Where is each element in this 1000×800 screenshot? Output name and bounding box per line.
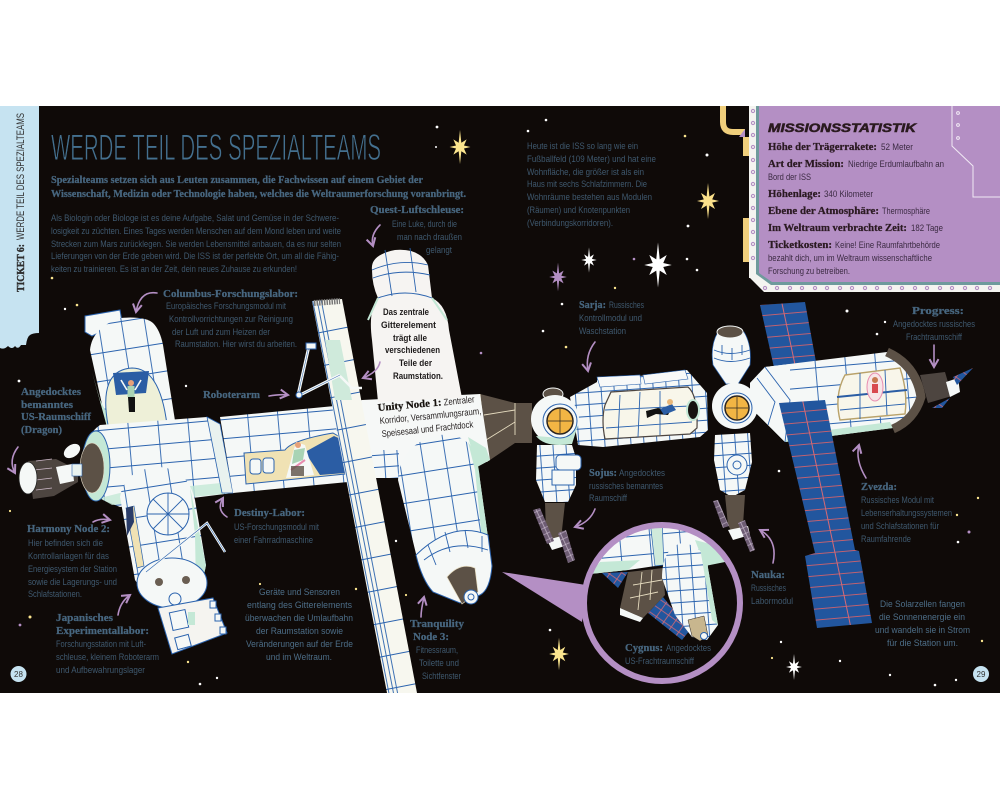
text: central truss note: verschiedenen	[385, 345, 440, 356]
label: Quest: man nach draußen	[397, 231, 462, 242]
statistics list	[768, 141, 944, 276]
label: Progress: Angedocktes russisches	[893, 318, 975, 329]
label: Japanese lab	[56, 613, 159, 675]
statistics list: 182 Tage	[911, 222, 943, 233]
title: WERDE TEIL DES SPEZIALTEAMS	[51, 127, 381, 168]
module: Quest airlock	[368, 248, 462, 402]
label: Progress: Frachtraumschiff	[906, 331, 962, 342]
label: Columbus: der Luft und zum Heizen der	[172, 326, 270, 337]
text: central truss note: trägt alle	[393, 333, 427, 344]
page number 29: 29	[977, 670, 986, 679]
icon: astronaut on bicycle	[291, 442, 305, 476]
truss: central lattice	[312, 299, 417, 693]
statistics list: Höhenlage:	[768, 189, 821, 200]
label: Tranquility: Tranquility	[410, 619, 464, 630]
text: ISS size: Wohnräume bestehen aus Modulen	[527, 191, 652, 202]
label: Quest: Eine Luke, durch die	[392, 218, 457, 229]
label: Sarja	[579, 299, 644, 336]
label: Harmony: Kontrollanlagen für das	[28, 550, 109, 561]
text: central truss note	[381, 307, 443, 382]
intro text: Spezialteams setzen sich aus Leuten zusammen, die Fachwissen auf einem Gebiet der	[51, 175, 423, 186]
label: Nauka: Russisches	[751, 582, 786, 593]
label: Harmony	[27, 524, 117, 599]
module: Russian main section	[570, 370, 708, 447]
label: Zvezda: Russisches Modul mit	[861, 494, 934, 505]
label: Tranquility: Sichtfenster	[422, 670, 461, 681]
label: Nauka: Nauka:	[751, 570, 785, 581]
label: Japanese lab: schleuse, kleinem Roboterarm	[56, 651, 159, 662]
box: experiment platform	[158, 598, 227, 654]
heading: Missionsstatistik: MISSIONSSTATISTIK	[768, 123, 917, 135]
label: Sarja: Kontrollmodul und	[579, 312, 642, 323]
statistics list: Ticketkosten:	[768, 240, 832, 251]
module: Tranquility	[398, 435, 492, 604]
module: upper vertical	[712, 326, 750, 384]
body text: keiten zu trainieren. Es ist an der Zeit, dein neues Zuhause zu erkunden!	[51, 263, 297, 274]
label: Sarja: Sarja:	[579, 300, 606, 311]
text: solar cells: die Sonnenenergie ein	[879, 612, 965, 623]
label: Harmony: Harmony Node 2:	[27, 524, 110, 535]
text: ISS size: Fußballfeld (109 Meter) und hat eine	[527, 153, 656, 164]
label: Columbus	[163, 289, 298, 349]
intro text: Wissenschaft, Medizin oder Technologie haben, welches die Weltraumerforschung voranbringt.	[51, 189, 466, 200]
left tab: ticket label: WERDE TEIL DES SPEZIALTEAMS	[15, 113, 27, 240]
page number 28: 28	[14, 670, 23, 679]
label: Tranquility: Node 3:	[413, 632, 449, 643]
callout: magnified inset	[502, 515, 745, 681]
label: Zvezda: und Schlafstationen für	[861, 520, 939, 531]
label: Cygnus: Angedocktes	[666, 642, 711, 653]
text: solar cells	[875, 599, 970, 649]
statistics list: Forschung zu betreiben.	[768, 265, 850, 276]
module: Zvezda	[750, 352, 921, 442]
label: Dragon: (Dragon)	[21, 425, 62, 436]
text: solar cells: und wandeln sie in Strom	[875, 625, 970, 636]
text: ISS size: Heute ist die ISS so lang wie ein	[527, 140, 638, 151]
icon: yellow window 2	[722, 393, 752, 423]
page number 29	[973, 666, 989, 682]
label: Sojus: Sojus:	[589, 468, 617, 479]
label: Dragon	[21, 387, 92, 436]
text: Unity node: Korridor, Versammlungsraum,	[379, 405, 482, 426]
text: central truss note: Teile der	[399, 358, 432, 369]
module: Russian left branch with Soyuz	[533, 445, 581, 563]
label: Sojus: Angedocktes	[619, 467, 665, 478]
panel: black spread background	[0, 106, 1000, 693]
label: Japanese lab: Japanisches	[56, 613, 113, 624]
body text: Lieferungen von der Erde geben wird. Die ISS ist der perfekte Ort, um all die Fähig-	[51, 250, 339, 261]
text: devices and sensors: Geräte und Sensoren	[259, 587, 340, 598]
spacecraft: Soyuz	[533, 503, 575, 563]
panel: mission statistics	[749, 106, 1000, 292]
label: Tranquility	[410, 619, 464, 681]
module: lower vertical with Soyuz	[713, 433, 755, 552]
left tab: ticket label	[0, 106, 39, 349]
arrows: purple pointers	[12, 225, 934, 617]
body text	[51, 212, 341, 274]
label: Zvezda: Lebenserhaltungssystemen	[861, 507, 952, 518]
label: Destiny: US-Forschungsmodul mit	[234, 521, 319, 532]
text: central truss note: Raumstation.	[393, 371, 443, 382]
text: ISS size: Wohnfläche, die größer ist als ein	[527, 166, 644, 177]
label: Quest: gelangt	[426, 244, 452, 255]
label: Zvezda: Zvezda:	[861, 482, 897, 493]
label: Sarja: Waschstation	[579, 325, 626, 336]
left tab: ticket label: TICKET 6:	[15, 244, 27, 292]
text: Unity node: Speisesaal und Frachtdock	[381, 418, 474, 439]
icon: small robotic arm	[146, 523, 225, 572]
label: Progress: Progress:	[912, 306, 964, 317]
icon: astronaut in sleeping pod	[867, 373, 883, 401]
text: ISS size	[527, 140, 656, 228]
label: Columbus: Kontrollvorrichtungen zur Reinigung	[169, 313, 293, 324]
text: central truss note: Gitterelement	[381, 320, 437, 331]
statistics list: Thermosphäre	[882, 205, 930, 216]
text: ISS size: (Verbindungskorridoren).	[527, 217, 613, 228]
statistics list: 340 Kilometer	[824, 188, 873, 199]
statistics list: Bord der ISS	[768, 171, 811, 182]
label: Destiny: einer Fahrradmaschine	[234, 534, 313, 545]
text: ISS size: Haus mit sechs Schlafzimmern. Die	[527, 178, 647, 189]
text: central truss note: Das zentrale	[383, 307, 429, 318]
text: ISS size: (Räumen) und Knotenpunkten	[527, 204, 630, 215]
text: devices and sensors	[245, 587, 353, 663]
module: Harmony node	[80, 417, 233, 507]
label: Harmony: Hier befinden sich die	[28, 537, 103, 548]
text: devices and sensors: überwachen die Umlaufbahn	[245, 613, 353, 624]
solar array lower part	[779, 400, 872, 628]
label: Destiny: Destiny-Labor:	[234, 508, 305, 519]
label: Sojus: russisches bemanntes	[589, 480, 663, 491]
text: Unity node: Zentraler	[443, 393, 475, 407]
stars and dots field	[9, 119, 983, 686]
label: Dragon: bemanntes	[21, 400, 73, 411]
icon: yellow pipe	[723, 106, 749, 262]
text: devices and sensors: und im Weltraum.	[266, 652, 332, 663]
text: devices and sensors: entlang des Gitterelements	[247, 600, 352, 611]
statistics list: Niedrige Erdumlaufbahn an	[848, 158, 944, 169]
label: Tranquility: Fitnessraum,	[416, 644, 458, 655]
page number 28	[10, 666, 26, 682]
spacecraft: Progress	[920, 368, 973, 408]
label: Tranquility: Toilette und	[419, 657, 459, 668]
icon: large robotic arm	[296, 343, 362, 398]
label: Cygnus	[625, 642, 711, 666]
text: Unity node: Unity Node 1:	[377, 397, 442, 414]
label: Zvezda: Raumfahrende	[861, 533, 911, 544]
label: Columbus: Raumstation. Hier wirst du arbeiten.	[175, 338, 297, 349]
body text: losigkeit zu züchten. Eines Tages werden Menschen auf dem Mond leben und weite	[51, 225, 341, 236]
module: Kibo lower arm	[120, 467, 227, 654]
text: Unity node	[377, 393, 482, 439]
spacecraft: Dragon	[19, 441, 83, 499]
label: Harmony: sowie die Lagerungs- und	[28, 576, 117, 587]
label: Zvezda	[861, 482, 952, 544]
label: Sarja: Russisches	[609, 299, 644, 310]
label: Harmony: Energiesystem der Station	[28, 563, 117, 574]
label: Harmony: Schlafstationen.	[28, 588, 82, 599]
text: devices and sensors: Veränderungen auf der Erde	[246, 639, 353, 650]
label: Progress	[893, 306, 975, 342]
module: Columbus lab	[85, 310, 176, 427]
statistics list: Im Weltraum verbrachte Zeit:	[768, 223, 907, 234]
text: solar cells: Die Solarzellen fangen	[880, 599, 965, 610]
label: Japanese lab: und Aufbewahrungslager	[56, 664, 145, 675]
label: Cygnus: US-Frachtraumschiff	[625, 655, 694, 666]
body text: Als Biologin oder Biologe ist es deine Aufgabe, Salat und Gemüse in der Schwere-	[51, 212, 339, 223]
icon: astronaut in Columbus	[121, 380, 141, 412]
statistics list: Art der Mission:	[768, 159, 844, 170]
solar array upper part	[760, 302, 816, 372]
label: Japanese lab: Forschungsstation mit Luft-	[56, 638, 146, 649]
text: solar cells: für die Station um.	[887, 638, 958, 649]
icon: yellow window	[543, 404, 577, 438]
module: Destiny lab	[220, 405, 348, 493]
label: Sojus: Raumschiff	[589, 492, 627, 503]
label: Cygnus: Cygnus:	[625, 643, 663, 654]
statistics list: 52 Meter	[881, 141, 913, 152]
text: devices and sensors: der Raumstation sowie	[256, 626, 343, 637]
statistics list: Keine! Eine Raumfahrtbehörde	[835, 239, 940, 250]
label: Quest	[370, 205, 464, 255]
label: Quest: Quest-Luftschleuse:	[370, 205, 464, 216]
statistics list: Höhe der Trägerrakete:	[768, 142, 877, 153]
label: Columbus: Columbus-Forschungslabor:	[163, 289, 298, 300]
icon: floating astronaut	[646, 399, 676, 418]
module: Russian node 1	[531, 388, 579, 445]
label: Nauka: Labormodul	[751, 595, 793, 606]
label: Sojus	[589, 467, 665, 503]
label: Roboterarm: Roboterarm	[203, 390, 261, 401]
label: Dragon: US-Raumschiff	[21, 412, 92, 423]
label: Japanese lab: Experimentallabor:	[56, 626, 149, 637]
label: Destiny	[234, 508, 319, 545]
body text: Strecken zum Mars zurücklegen. Sie werden Lebensmittel anbauen, da es nur selten	[51, 238, 341, 249]
module: Russian node 2 with vertical modules	[712, 326, 758, 552]
label: Dragon: Angedocktes	[21, 387, 81, 398]
module: Unity body and cone	[345, 394, 532, 482]
intro text	[51, 175, 466, 200]
label: Columbus: Europäisches Forschungsmodul mit	[166, 300, 286, 311]
statistics list: bezahlt dich, um im Weltraum wissenschaftliche	[768, 252, 932, 263]
label: Nauka	[751, 570, 793, 606]
statistics list: Ebene der Atmosphäre:	[768, 206, 879, 217]
